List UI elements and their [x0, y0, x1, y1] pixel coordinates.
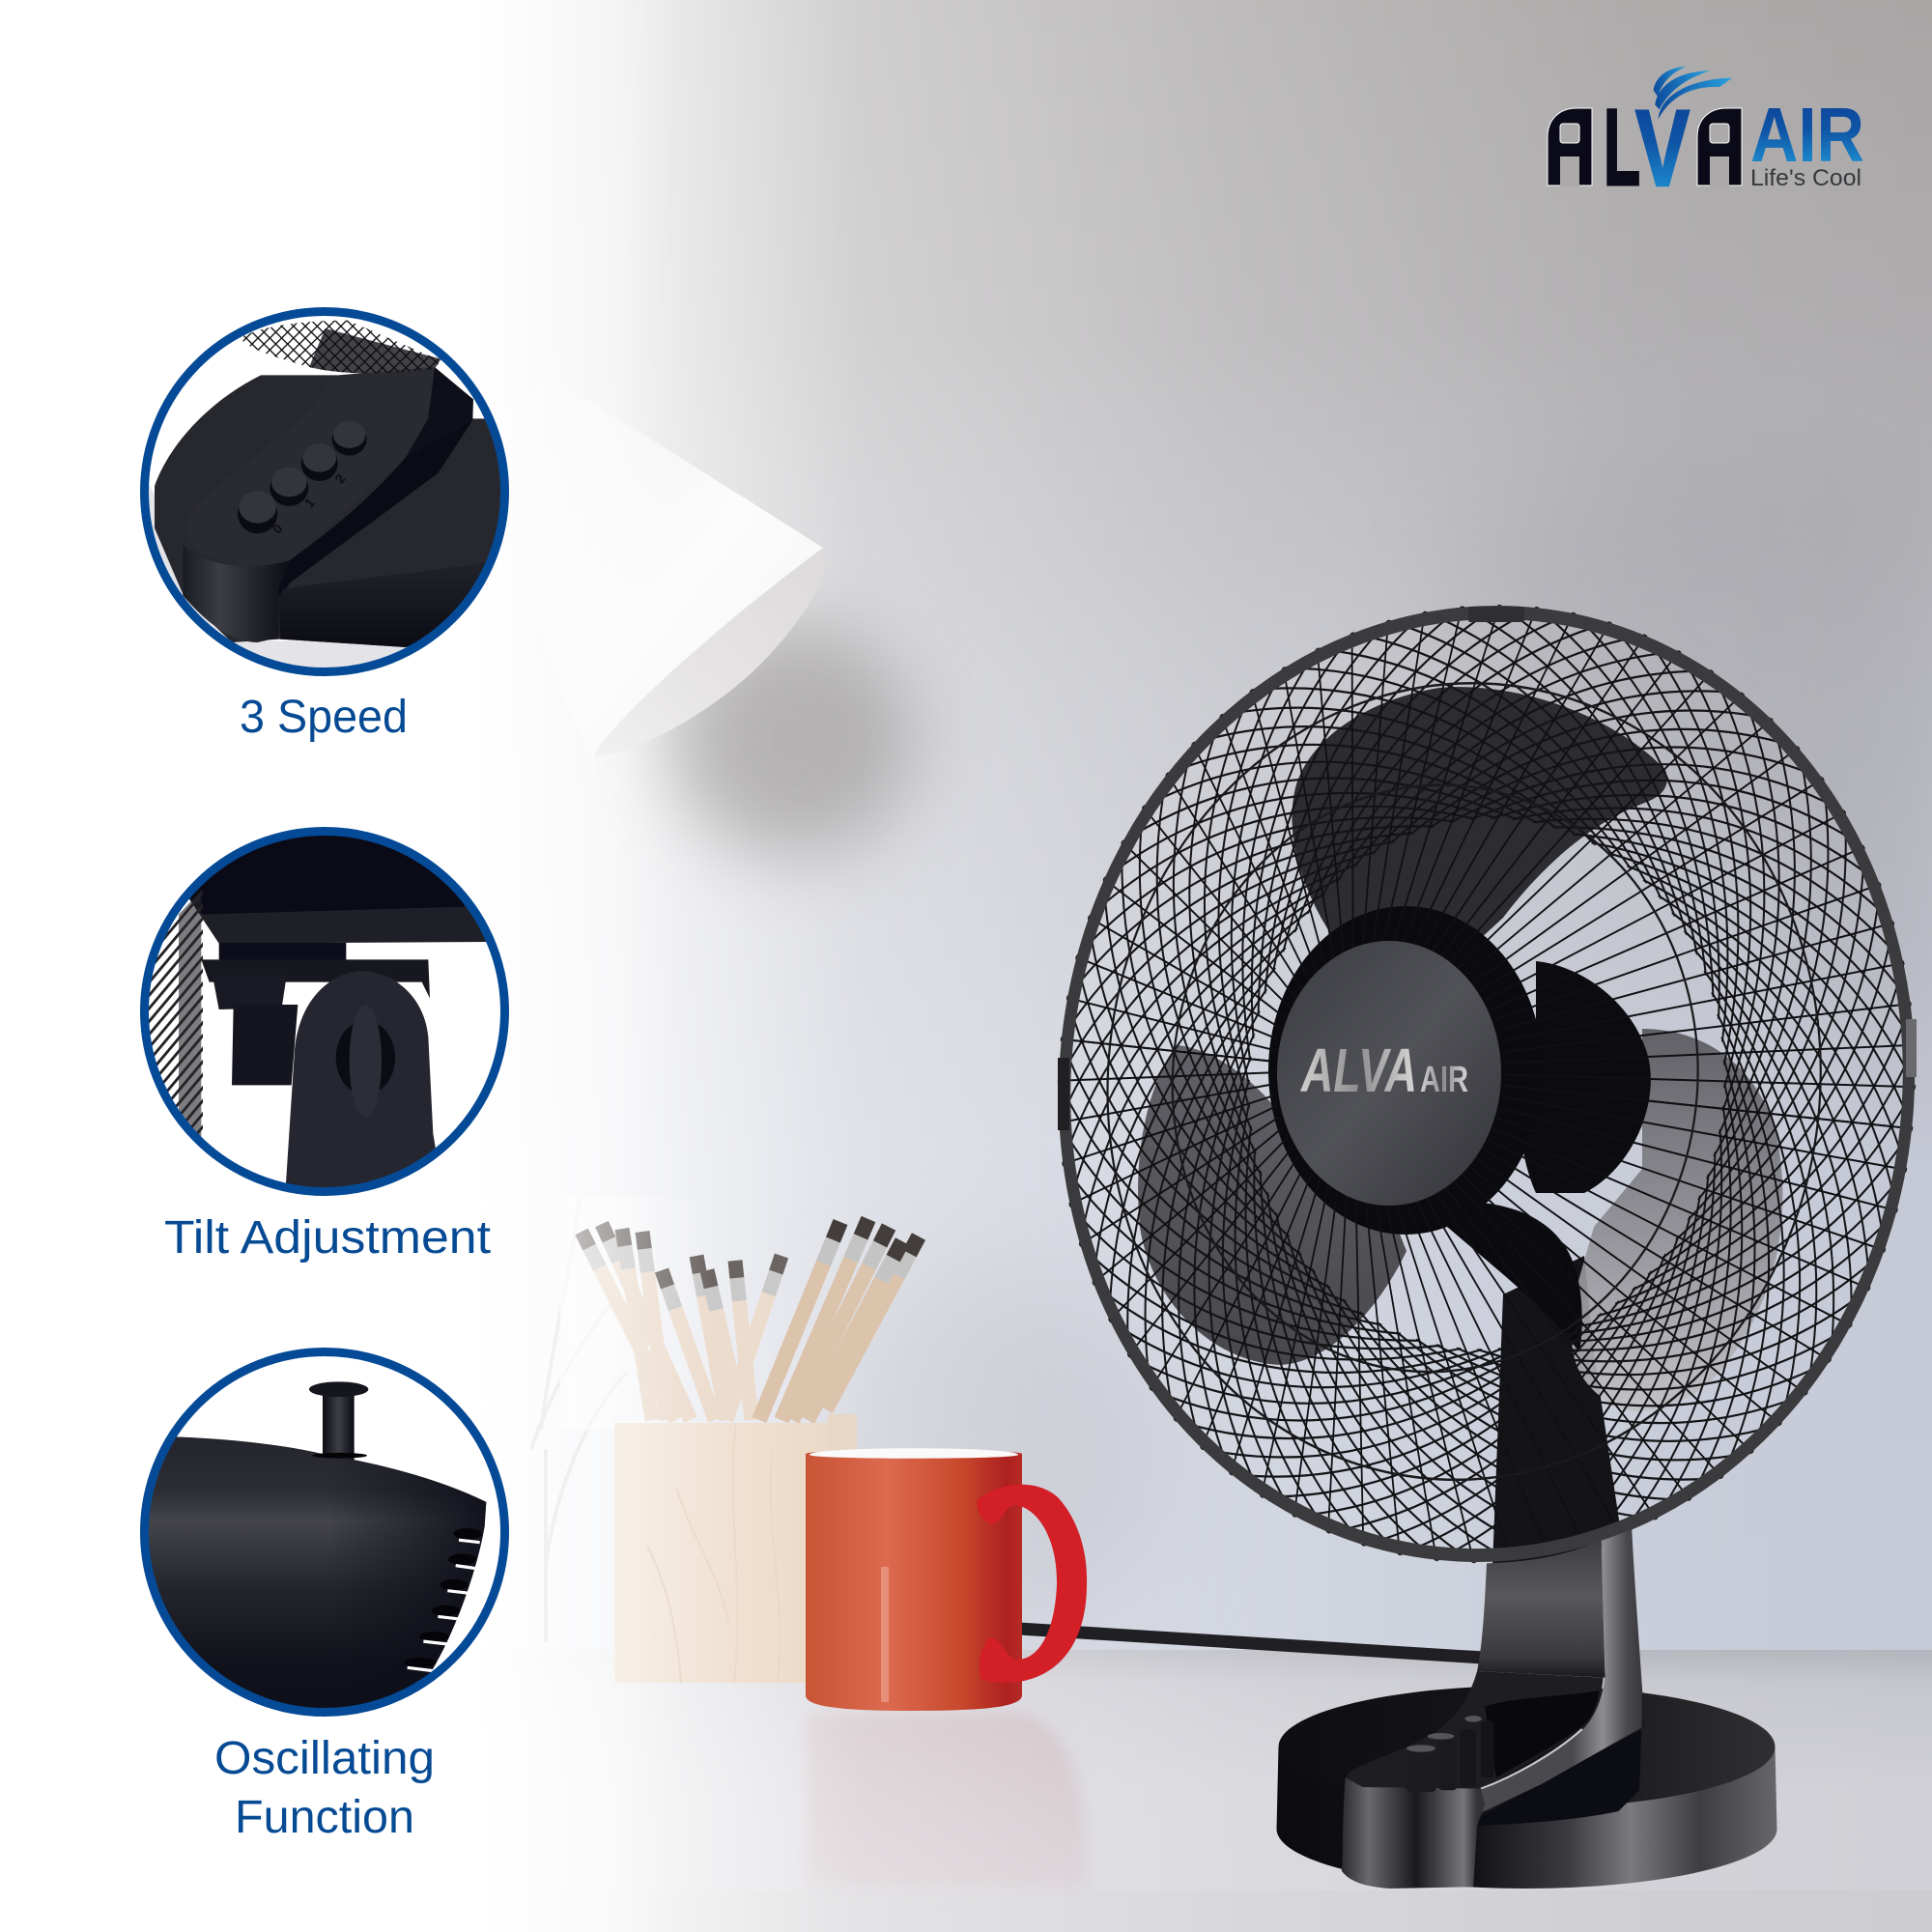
- plate dark reflection: [1485, 1690, 1600, 1777]
- knob slot: [312, 1453, 367, 1459]
- logo wordmark ALVA: A: [1550, 87, 1589, 208]
- logo wordmark AIR: AIR: [1750, 92, 1864, 178]
- motor bulge: [213, 976, 287, 1009]
- reflection: mug on table: [806, 1712, 1087, 1889]
- pencil fade overlay: [560, 1198, 715, 1430]
- rim right clip: [1906, 1019, 1917, 1077]
- bracket: [201, 959, 430, 998]
- mug body: [806, 1450, 1022, 1711]
- logo swoosh: [1654, 67, 1732, 119]
- neck: [285, 971, 438, 1198]
- mug rim: [810, 1448, 1018, 1459]
- plate highlight: [1481, 1729, 1582, 1789]
- feature circle: Tilt Adjustment: [135, 818, 522, 1198]
- speed marks: 1: [301, 495, 318, 511]
- logo tagline: Life's Cool: [1750, 165, 1861, 191]
- neck right strip: [1481, 1529, 1644, 1813]
- rim top clip: [1468, 607, 1524, 622]
- lattice wires counter-clockwise: [786, 317, 1932, 1851]
- logo wordmark ALVA: A: [1700, 87, 1739, 208]
- blade: left: [1138, 1045, 1406, 1365]
- mug: [806, 1448, 1087, 1711]
- grille mesh: [240, 321, 441, 373]
- label: Oscillating Function: [214, 1733, 435, 1843]
- fan stand and base: [1277, 1529, 1776, 1889]
- motor body: [135, 1435, 486, 1719]
- tilt knob: [350, 1005, 382, 1118]
- dark wedge: [1477, 1729, 1641, 1826]
- background: table top: [0, 1650, 1932, 1932]
- hub logo: AIR: [1420, 1060, 1468, 1100]
- fan neck behind grille: [1492, 1256, 1623, 1567]
- pencil holder: [560, 1198, 919, 1683]
- oscillation knob stem: [323, 1392, 355, 1461]
- right edge shading: [135, 1435, 486, 1719]
- oscillation knob cap: [309, 1381, 368, 1397]
- feature circle: 3 Speed: [144, 311, 515, 676]
- hub: [1277, 941, 1501, 1206]
- motor block: [232, 1005, 298, 1085]
- feature circle: Oscillating Function: [135, 1351, 505, 1719]
- blade: right translucent: [1571, 1029, 1782, 1411]
- lobe side: [183, 544, 290, 642]
- circle border: [145, 311, 504, 672]
- pivot disc: [219, 943, 346, 961]
- speed buttons: [1406, 1716, 1493, 1792]
- circle border: [145, 831, 504, 1192]
- mug highlight: [881, 1567, 889, 1702]
- circle photo: tilt joint: [149, 836, 487, 1187]
- pencils left and middle: [582, 1224, 781, 1420]
- knob recess: [336, 1021, 395, 1094]
- base plinth shadow: [149, 485, 408, 668]
- lamp cone body: [517, 357, 823, 756]
- logo wordmark ALVA: L: [1604, 87, 1640, 208]
- blade: right dark root: [1520, 961, 1651, 1193]
- blade: lower root: [1420, 1201, 1582, 1352]
- radial spokes: [1011, 562, 1932, 1605]
- background: table front strip: [0, 1890, 1932, 1932]
- rim left clip: [1058, 1058, 1069, 1130]
- back housing: [155, 367, 515, 647]
- circle photo: motor housing: [135, 1351, 505, 1719]
- background: fan shadow on wall: [1449, 445, 1932, 1159]
- diagonal shadow band: [270, 420, 472, 599]
- head top: [189, 836, 466, 915]
- lamp shade: [517, 357, 826, 756]
- grille wires: [786, 317, 1932, 1851]
- lamp inner rim: [595, 548, 826, 756]
- speed marks: 0: [269, 521, 286, 536]
- circle border: [145, 1352, 504, 1712]
- label: 3 Speed: 3 Speed: [240, 692, 408, 743]
- grille rim: [179, 891, 201, 1137]
- head band: [200, 906, 490, 944]
- control lobe side: [1342, 1777, 1485, 1889]
- base side wall: [1277, 1747, 1776, 1889]
- base top surface: [1278, 1686, 1776, 1808]
- control plate top: [1347, 1671, 1604, 1792]
- speed marks: [272, 474, 346, 533]
- wood grain: [647, 1423, 780, 1683]
- concentric rings: [1068, 648, 1860, 1515]
- circle photo: controls: [144, 311, 515, 676]
- lattice wires clockwise: [786, 317, 1932, 1851]
- label: Oscillating Function: Function: [235, 1792, 414, 1843]
- neck: [406, 367, 473, 457]
- plant: faint leaves: [531, 1198, 628, 1642]
- mug handle: [978, 1485, 1087, 1683]
- speed marks: 2: [331, 470, 349, 487]
- logo wordmark ALVA: [1548, 87, 1742, 209]
- blade: top: [1292, 687, 1667, 952]
- grille backing: [309, 328, 441, 373]
- front holder box: [614, 1423, 828, 1683]
- grille edge stripes: [145, 889, 203, 1140]
- control plate: [187, 367, 435, 566]
- power cord: [1019, 1629, 1483, 1658]
- brand logo: [1548, 67, 1864, 209]
- fan: [786, 317, 1932, 1851]
- logo wordmark ALVA: V: [1635, 88, 1690, 209]
- label: Tilt Adjustment: Tilt Adjustment: [164, 1212, 491, 1264]
- right base rim: [278, 572, 481, 647]
- rim outer ring: [1018, 571, 1932, 1597]
- back holder box: [828, 1414, 857, 1453]
- vent slots: [404, 1528, 482, 1671]
- background: shadow behind mug and pencil cup: [821, 1265, 1150, 1652]
- pencils right: [759, 1219, 919, 1420]
- buttons: [238, 421, 367, 533]
- label: Oscillating Function: Oscillating: [214, 1733, 435, 1784]
- hub logo: ALVA: [1300, 1036, 1417, 1105]
- background: lamp shadow on wall: [671, 623, 913, 855]
- hub backing ring: [1268, 906, 1543, 1235]
- neck front panel: [1477, 1541, 1605, 1678]
